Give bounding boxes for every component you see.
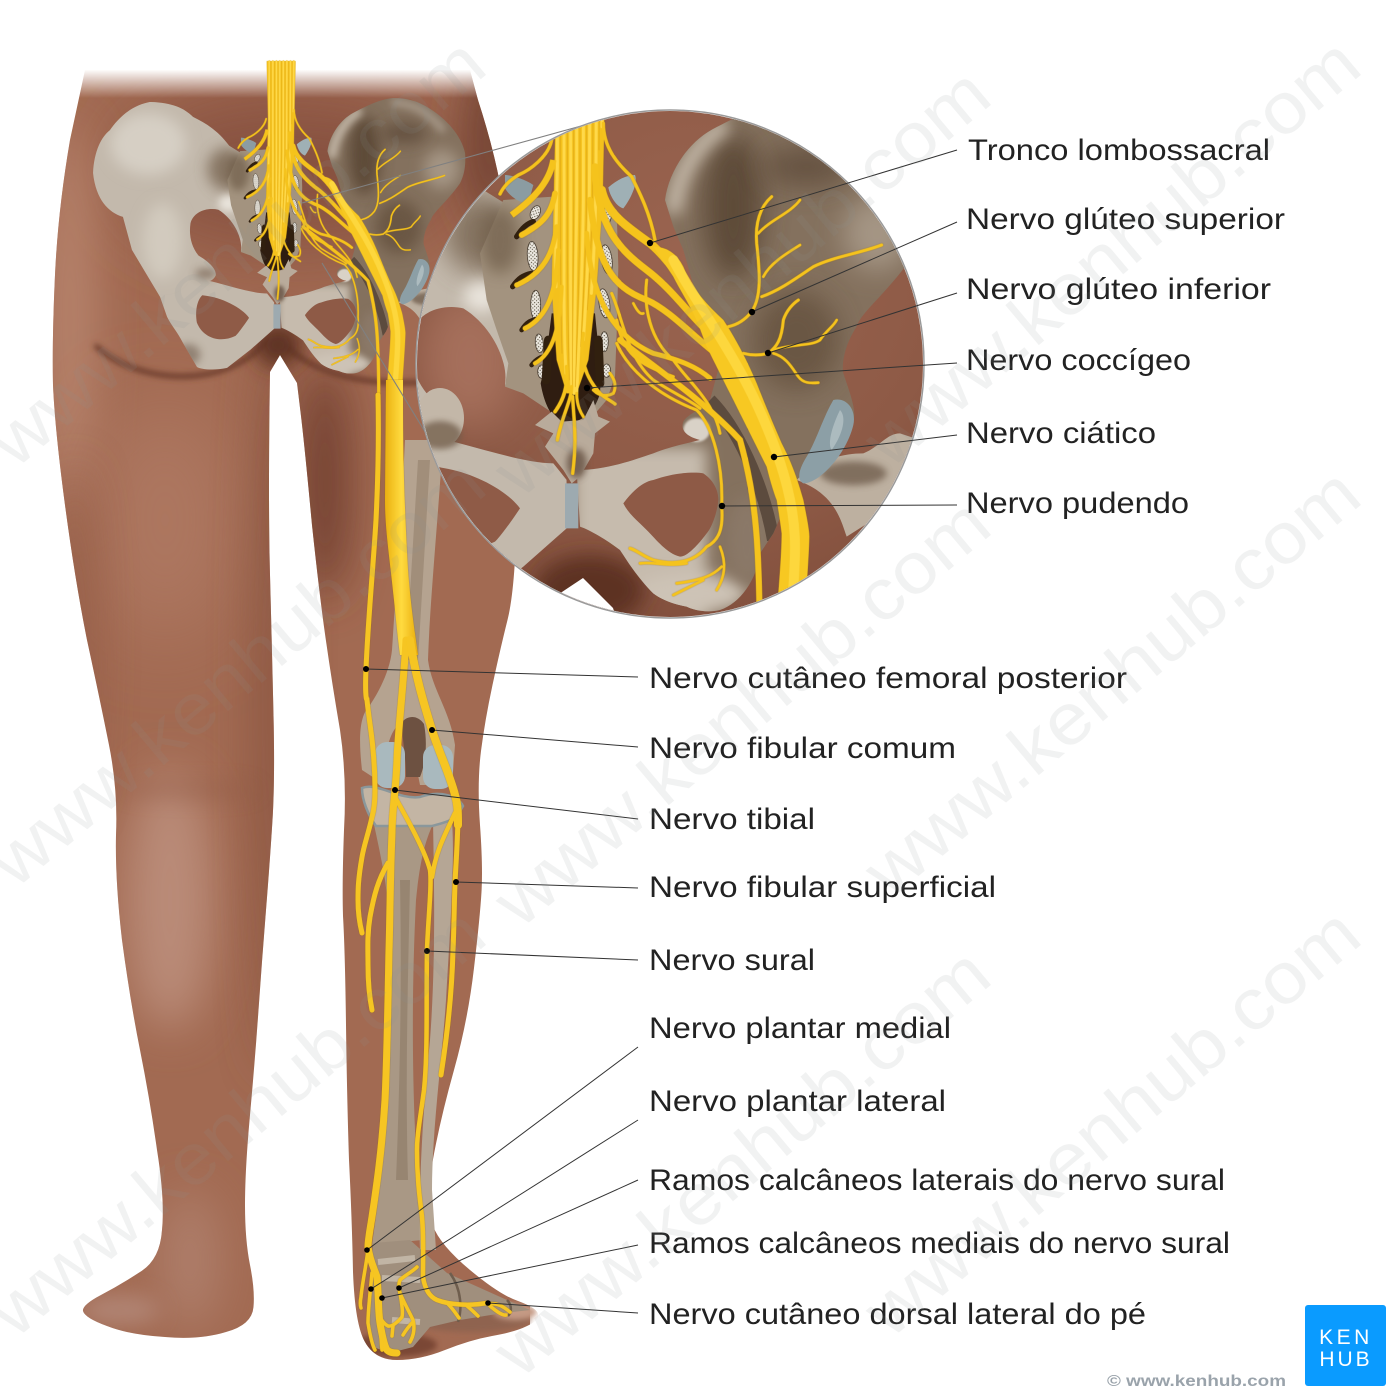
- tibial nerve: [368, 640, 406, 1353]
- kenhub logo: HUB: [1319, 1348, 1373, 1371]
- leader: pudendo: [719, 503, 957, 509]
- label: Ramos calcâneos mediais do nervo sural: [649, 1227, 1230, 1260]
- leader: tronco lombossacral: [647, 150, 957, 246]
- label: Nervo fibular comum: [649, 732, 956, 765]
- watermark: www.kenhub.com: [848, 892, 1375, 1353]
- leader: calcaneos mediais: [379, 1245, 638, 1301]
- leader: fibular comum: [429, 727, 638, 747]
- label: Nervo coccígeo: [966, 344, 1191, 377]
- top fade of torso: [60, 60, 500, 98]
- posterior femoral cutaneous nerve: [358, 395, 378, 933]
- leader: gluteo superior: [749, 222, 957, 315]
- label: Nervo glúteo inferior: [966, 273, 1271, 306]
- foot branches: [360, 1250, 510, 1350]
- knee cartilage lateral: [423, 745, 453, 789]
- label: Nervo plantar medial: [649, 1012, 951, 1045]
- label: Nervo fibular superficial: [649, 871, 996, 904]
- leader: gluteo inferior: [765, 293, 957, 356]
- leader: cutaneo femoral posterior: [363, 666, 638, 677]
- kenhub logo: [1305, 1305, 1386, 1386]
- kenhub logo: KEN: [1319, 1326, 1373, 1349]
- leg bones: [360, 440, 530, 1353]
- label: Nervo cutâneo femoral posterior: [649, 662, 1127, 695]
- watermark: www.kenhub.com: [848, 22, 1375, 483]
- label: Ramos calcâneos laterais do nervo sural: [649, 1164, 1225, 1197]
- leader: cutaneo dorsal lateral: [485, 1300, 638, 1313]
- watermark: www.kenhub.com: [478, 932, 1005, 1393]
- magnified inset circle: [415, 109, 925, 619]
- leader: plantar medial: [364, 1047, 638, 1253]
- fibula: [419, 820, 453, 1250]
- leader: sural: [424, 948, 638, 960]
- watermark: www.kenhub.com: [478, 482, 1005, 943]
- lateral sural branch: [432, 813, 455, 877]
- tibia: [372, 815, 435, 1245]
- leader lines: [363, 150, 957, 1313]
- label: Nervo pudendo: [966, 487, 1189, 520]
- leader: calcaneos laterais: [396, 1180, 638, 1291]
- watermark: www.kenhub.com: [478, 52, 1005, 513]
- sciatic trunk: [385, 380, 418, 655]
- tibial plateau: [362, 787, 463, 826]
- label: Nervo sural: [649, 944, 815, 977]
- label: Nervo glúteo superior: [966, 203, 1285, 236]
- label: Nervo ciático: [966, 417, 1156, 450]
- label: Nervo cutâneo dorsal lateral do pé: [649, 1298, 1146, 1331]
- labels: [649, 134, 1285, 1331]
- label: Nervo plantar lateral: [649, 1085, 946, 1118]
- watermark: www.kenhub.com: [848, 452, 1375, 913]
- small pelvis with sacral plexus: [87, 61, 469, 407]
- leader: fibular superficial: [453, 879, 638, 888]
- copyright: © www.kenhub.com: [1107, 1373, 1286, 1390]
- label: Tronco lombossacral: [968, 134, 1270, 167]
- label: Nervo tibial: [649, 803, 815, 836]
- medial sural branch: [395, 797, 487, 1305]
- common fibular nerve: [410, 640, 458, 825]
- leader: coccigeo: [584, 363, 957, 391]
- leader: tibial: [392, 787, 638, 819]
- superficial fibular nerve: [441, 810, 458, 1075]
- leader: plantar lateral: [368, 1120, 638, 1292]
- leader: ciatico: [771, 435, 957, 460]
- femur: [360, 440, 455, 785]
- foot bones: [367, 1240, 530, 1353]
- calf branch: [368, 863, 388, 1010]
- knee cartilage: [375, 742, 405, 788]
- body silhouette: [40, 50, 537, 1370]
- magnification guide lines: [302, 118, 610, 440]
- leg nerves: [358, 380, 510, 1353]
